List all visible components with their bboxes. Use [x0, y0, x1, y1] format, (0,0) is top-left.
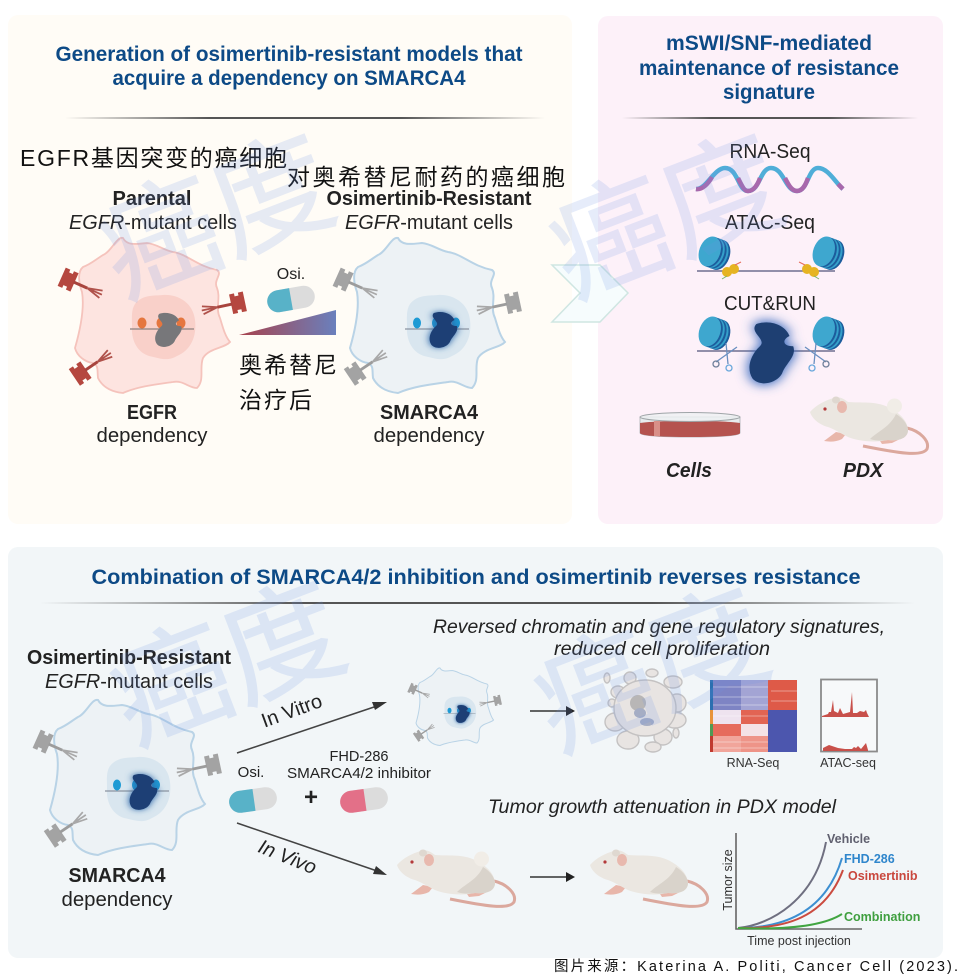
label: parental cells — [69, 187, 237, 234]
label: FHD-286 inhibitor: FHD-286 — [330, 748, 388, 765]
text: reversed signatures — [433, 616, 885, 660]
label: SMARCA4 dependency bottom — [62, 864, 173, 911]
text: reversed signatures: Reversed chromatin and gene regulatory signatures, — [433, 616, 885, 638]
label: Osi: Osi. — [277, 266, 305, 283]
arrow: in vivo — [237, 823, 387, 875]
icon: resistant cell — [333, 238, 522, 393]
icon: resistant cell bottom — [33, 700, 222, 855]
panel: model generation — [8, 15, 572, 524]
chart: ATAC-seq tracks — [821, 680, 877, 752]
icon: parental cell — [58, 238, 247, 393]
label: ATAC-Seq: ATAC-Seq — [725, 211, 815, 234]
chinese label: after osimertinib treatment: 奥希替尼 — [239, 352, 337, 378]
heading: model generation: acquire a dependency on SMARCA4 — [112, 66, 466, 90]
heading: resistance signature: signature — [723, 80, 815, 104]
watermark: bottom right: 癌度 — [507, 540, 789, 784]
chinese label: EGFR mutant cells: EGFR基因突变的癌细胞 — [20, 145, 287, 171]
heading: resistance signature — [639, 31, 899, 104]
gradient wedge — [239, 310, 336, 335]
watermark: bottom left: 癌度 — [83, 533, 365, 777]
label: EGFR dependency: EGFR — [127, 401, 177, 424]
label: RNA-Seq small: RNA-Seq — [727, 756, 779, 770]
icon: RNA wave — [696, 168, 843, 191]
text: reversed signatures: reduced cell proliferation — [554, 638, 770, 660]
label: CUT&RUN: CUT&RUN — [724, 292, 816, 315]
arrow: mouse to mouse — [530, 872, 575, 882]
arrow: chevron — [552, 265, 628, 322]
chinese label: after osimertinib treatment — [239, 352, 337, 413]
label: FHD-286 inhibitor — [287, 748, 431, 782]
label: parental cells: EGFR-mutant cells — [69, 211, 237, 234]
label: RNA-Seq: RNA-Seq — [730, 140, 810, 163]
chart: tumor growth curves: Combination — [844, 910, 920, 924]
source credit: 图片来源：Katerina A. Politi, Cancer Cell (2023). — [554, 958, 958, 975]
label: EGFR dependency: dependency — [96, 424, 208, 447]
icon: ATAC-seq diagram — [695, 233, 848, 279]
label: Cells: Cells — [666, 460, 712, 482]
icon: fragmented cell — [604, 669, 686, 752]
arrow: to dying cell — [530, 706, 575, 716]
label: SMARCA4 dependency — [374, 401, 485, 447]
label: PDX: PDX — [843, 460, 885, 482]
panel: resistance signature — [598, 16, 943, 524]
label: SMARCA4 dependency: dependency — [374, 424, 485, 447]
icon: osimertinib pill — [265, 284, 317, 314]
label: resistant cells: Osimertinib-Resistant — [326, 187, 532, 210]
chart: tumor growth curves: Vehicle — [827, 832, 870, 846]
chinese label: after osimertinib treatment: 治疗后 — [239, 387, 312, 413]
heading: resistance signature: maintenance of resistance — [639, 56, 899, 80]
heading: combination therapy: Combination of SMARCA4/2 inhibition and osimertinib reverses resistance — [92, 565, 861, 589]
text: tumor growth: Tumor growth attenuation in PDX model — [488, 796, 837, 818]
watermark: top right: 癌度 — [522, 86, 804, 330]
chart: tumor growth curves: FHD-286 — [844, 852, 895, 866]
plus sign: + — [304, 784, 318, 811]
icon: osimertinib pill bottom — [228, 786, 278, 814]
label: ATAC-seq small: ATAC-seq — [820, 756, 876, 770]
chart: tumor growth curves: Tumor size — [721, 849, 735, 911]
chart: tumor growth curves: Time post injection — [747, 934, 851, 948]
label: parental cells: Parental — [112, 187, 192, 210]
chinese label: osimertinib resistant cells: 对奥希替尼耐药的癌细胞 — [287, 164, 565, 190]
label: resistant cells bottom: EGFR-mutant cells — [45, 670, 213, 693]
icon: CUT&RUN diagram — [695, 313, 848, 385]
arrow: in vitro — [237, 702, 387, 753]
icon: mouse with tumor — [397, 850, 515, 906]
chart: RNA-Seq heatmap — [710, 680, 797, 752]
icon: FHD-286 pill — [339, 786, 389, 814]
label: Osi bottom: Osi. — [238, 764, 264, 781]
label: In Vivo: In Vivo — [255, 836, 320, 879]
icon: petri dish — [640, 412, 740, 437]
chart: tumor growth curves — [721, 832, 920, 948]
label: resistant cells — [326, 187, 532, 234]
icon: mouse PDX — [810, 396, 928, 453]
label: resistant cells: EGFR-mutant cells — [345, 211, 513, 234]
heading: model generation: Generation of osimertinib-resistant models that — [56, 42, 522, 66]
label: In Vitro: In Vitro — [259, 690, 325, 732]
icon: treated mouse — [590, 850, 708, 906]
label: FHD-286 inhibitor: SMARCA4/2 inhibitor — [287, 765, 431, 782]
label: EGFR dependency — [96, 401, 208, 447]
label: resistant cells bottom — [27, 646, 231, 693]
panel: combination therapy — [8, 547, 943, 958]
label: SMARCA4 dependency: SMARCA4 — [380, 401, 479, 424]
watermark: top left: 癌度 — [72, 86, 354, 330]
icon: small resistant cell — [407, 668, 502, 746]
label: resistant cells bottom: Osimertinib-Resistant — [27, 646, 231, 669]
heading: model generation — [56, 42, 522, 90]
label: SMARCA4 dependency bottom: dependency — [62, 888, 173, 911]
heading: resistance signature: mSWI/SNF-mediated — [666, 31, 872, 55]
chart: tumor growth curves: Osimertinib — [848, 869, 918, 883]
label: SMARCA4 dependency bottom: SMARCA4 — [68, 864, 166, 887]
